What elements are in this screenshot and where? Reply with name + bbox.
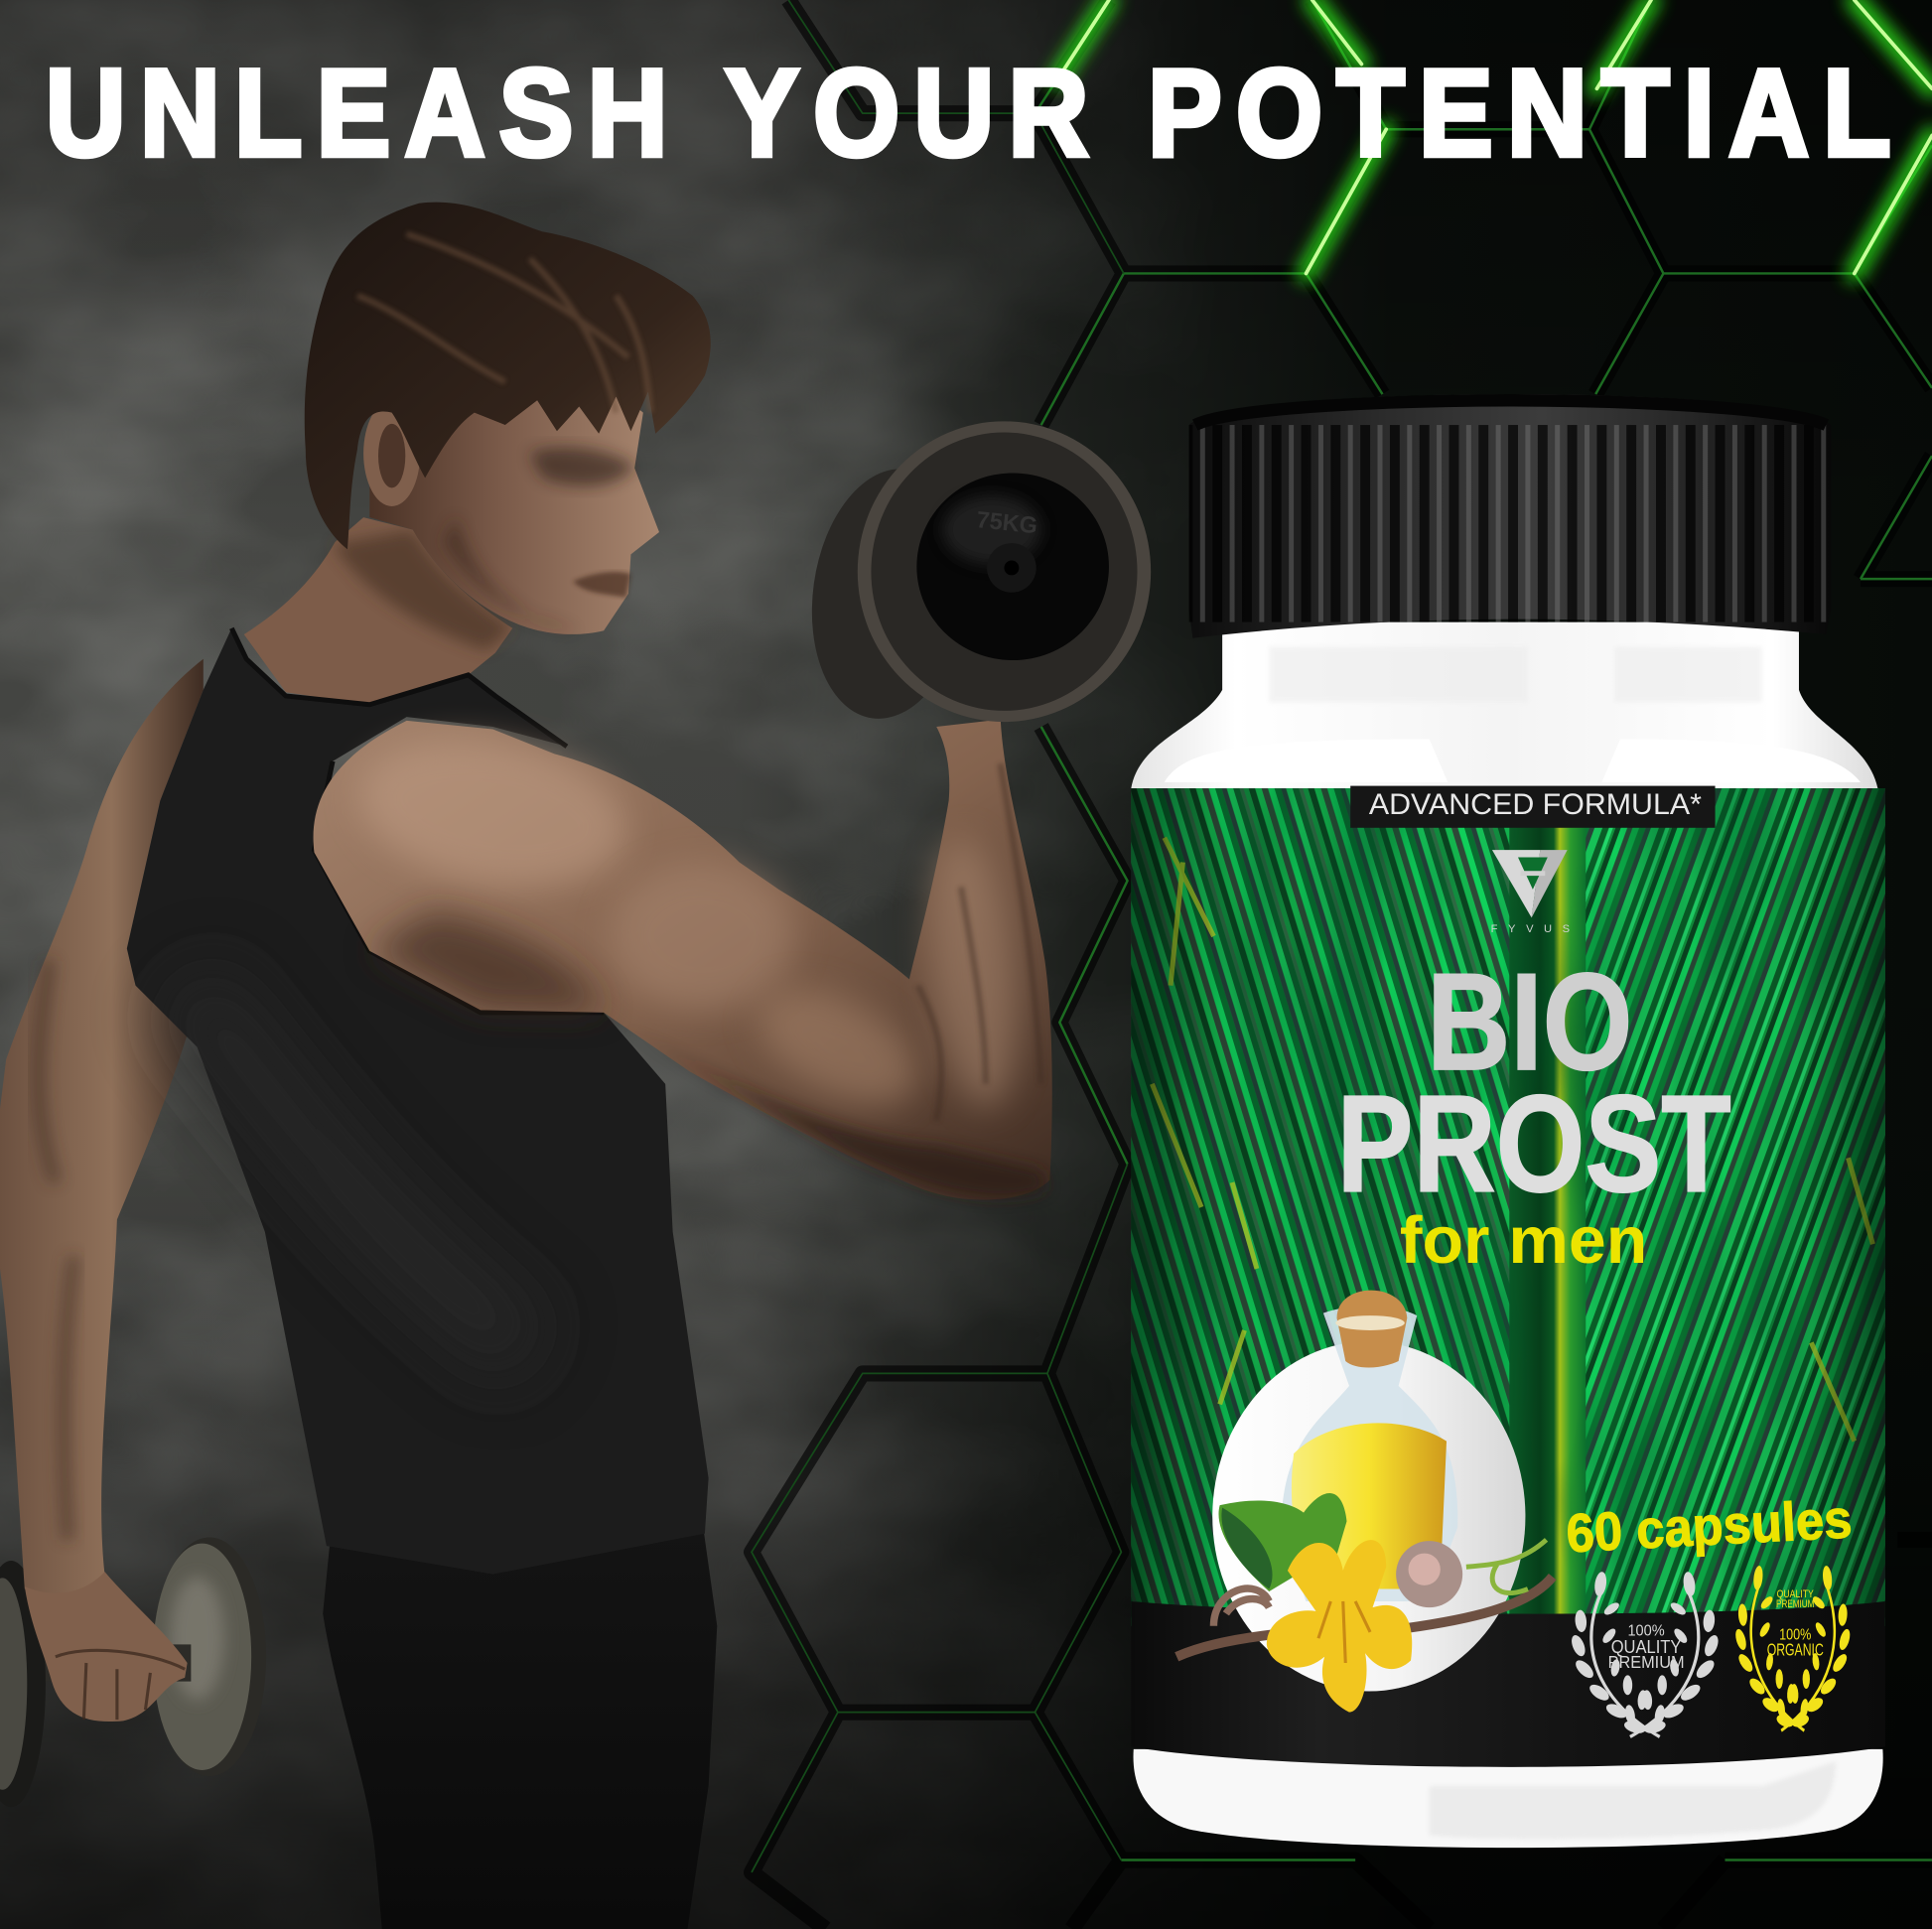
label: green leaf pattern: [1131, 788, 1885, 1626]
logo FYVUS: [1491, 850, 1570, 935]
for men: for men: [1400, 1203, 1647, 1278]
illustration: oil bottle with flower: [1176, 1291, 1553, 1713]
neon hexagon highlights: [1057, 0, 1932, 273]
badge: 100% quality premium: QUALITY: [1611, 1636, 1681, 1657]
badge: 100% quality premium: 100%: [1627, 1622, 1665, 1640]
bottle base: [1134, 1749, 1883, 1848]
logo FYVUS: FYVUS: [1491, 923, 1570, 935]
badge: 100% quality premium: PREMIUM: [1608, 1652, 1685, 1672]
neck: [244, 517, 512, 705]
product name: PROST: [1337, 1067, 1731, 1221]
badge: 100% organic: PREMIUM: [1776, 1598, 1814, 1610]
badge: 100% organic: [1733, 1565, 1852, 1730]
upper dumbbell: [796, 421, 1151, 729]
man: [0, 203, 1052, 1929]
product name: [1337, 945, 1731, 1221]
bottle: [1131, 394, 1885, 1848]
advanced formula tag: ADVANCED FORMULA*: [1369, 788, 1702, 821]
arm lowered: [0, 659, 204, 1601]
hand: [25, 1572, 188, 1722]
title: UNLEASH YOUR POTENTIAL: [46, 45, 1891, 183]
ear: [363, 400, 420, 506]
advanced formula tag: [1350, 786, 1716, 828]
60 capsules: 60 capsules: [1565, 1488, 1854, 1564]
dumbbell weight label: 75KG: [975, 506, 1038, 538]
shorts: [323, 1521, 717, 1929]
badge: 100% organic: ORGANIC: [1767, 1640, 1824, 1660]
flexed arm: [314, 720, 1052, 1200]
hexagon grid background: [752, 0, 1932, 1929]
label: black band: [1131, 1601, 1885, 1767]
badge: 100% quality premium: [1569, 1572, 1721, 1736]
bottle shoulder and neck: [1131, 622, 1877, 788]
tank top: [127, 628, 709, 1575]
hair: [305, 203, 711, 549]
face: [369, 369, 659, 634]
badge: 100% organic: QUALITY: [1777, 1588, 1814, 1600]
bottle cap: [1189, 394, 1831, 638]
product name: BIO: [1427, 945, 1632, 1099]
badge: 100% organic: 100%: [1779, 1625, 1811, 1643]
lower dumbbell: [0, 1537, 266, 1807]
